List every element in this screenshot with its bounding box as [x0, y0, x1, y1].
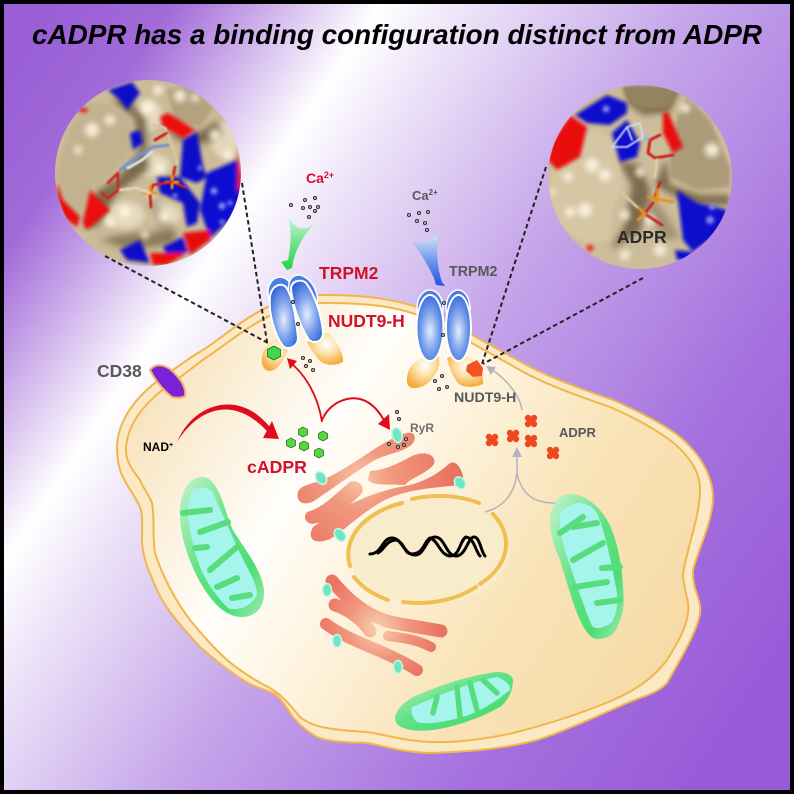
label: ADPR: ADPR — [559, 425, 596, 440]
label: ADPR on surface: ADPR — [617, 227, 667, 247]
left NUDT9-H domains — [262, 333, 343, 371]
label: TRPM2 red: TRPM2 — [319, 263, 379, 283]
ligand in right NUDT9-H — [466, 360, 483, 377]
label: cADPR: cADPR — [247, 457, 307, 477]
red arrow: cADPR to NUDT9-H — [287, 358, 322, 422]
left protein surface close-up — [55, 80, 241, 266]
mitochondrion left — [180, 477, 264, 617]
green entry arrow — [281, 215, 313, 270]
label: Ca2+ red: Ca — [306, 170, 324, 186]
Ca2+ ion dots — [289, 196, 449, 449]
right NUDT9-H domains — [407, 353, 483, 388]
label: Ca2+ grey: 2+ — [429, 188, 438, 197]
cell body — [117, 295, 713, 753]
mitochondrion bottom — [395, 672, 513, 731]
red arrow: NAD+ to cADPR — [177, 404, 279, 442]
ER upper stack — [297, 433, 464, 542]
ER lower stack — [326, 581, 441, 670]
label: TRPM2 grey: TRPM2 — [449, 264, 498, 280]
ligand in left NUDT9-H — [268, 346, 280, 360]
nucleus interior — [347, 498, 509, 604]
grey arrowheads — [486, 366, 522, 457]
dashed lines from close-ups — [105, 167, 643, 364]
right TRPM2 channel with NUDT9-H — [407, 290, 483, 388]
label: NAD+: + — [169, 442, 173, 449]
right lobe of surface — [670, 97, 730, 190]
label: CD38: CD38 — [97, 361, 142, 381]
blue entry arrow — [412, 235, 445, 286]
nucleus envelope — [348, 496, 506, 603]
ADPR molecules — [486, 415, 559, 459]
grey arrows — [485, 369, 555, 512]
label: Ca2+ grey: Ca — [412, 188, 429, 203]
left lobe of surface — [60, 106, 130, 212]
title: cADPR has a binding configuration distinct from ADPR — [32, 19, 762, 50]
label: Ca2+ red: 2+ — [324, 170, 334, 180]
label: NUDT9-H red: NUDT9-H — [328, 311, 405, 331]
ligand: cADPR sticks — [102, 125, 185, 207]
RyR channels on ER — [313, 426, 468, 674]
red arrow: cADPR to RyR — [322, 398, 390, 430]
right protein surface close-up — [545, 80, 735, 270]
CD38 enzyme — [150, 365, 185, 398]
ligand: ADPR sticks — [612, 123, 673, 225]
mitochondrion right — [550, 494, 624, 639]
left lobe of surface — [550, 127, 623, 245]
left TRPM2 channel with NUDT9-H — [262, 270, 343, 371]
label: NUDT9-H grey: NUDT9-H — [454, 390, 516, 406]
cADPR molecules — [286, 427, 328, 458]
label: NAD+: NAD — [143, 440, 169, 454]
label: RyR: RyR — [410, 421, 434, 435]
DNA helix — [370, 537, 485, 556]
